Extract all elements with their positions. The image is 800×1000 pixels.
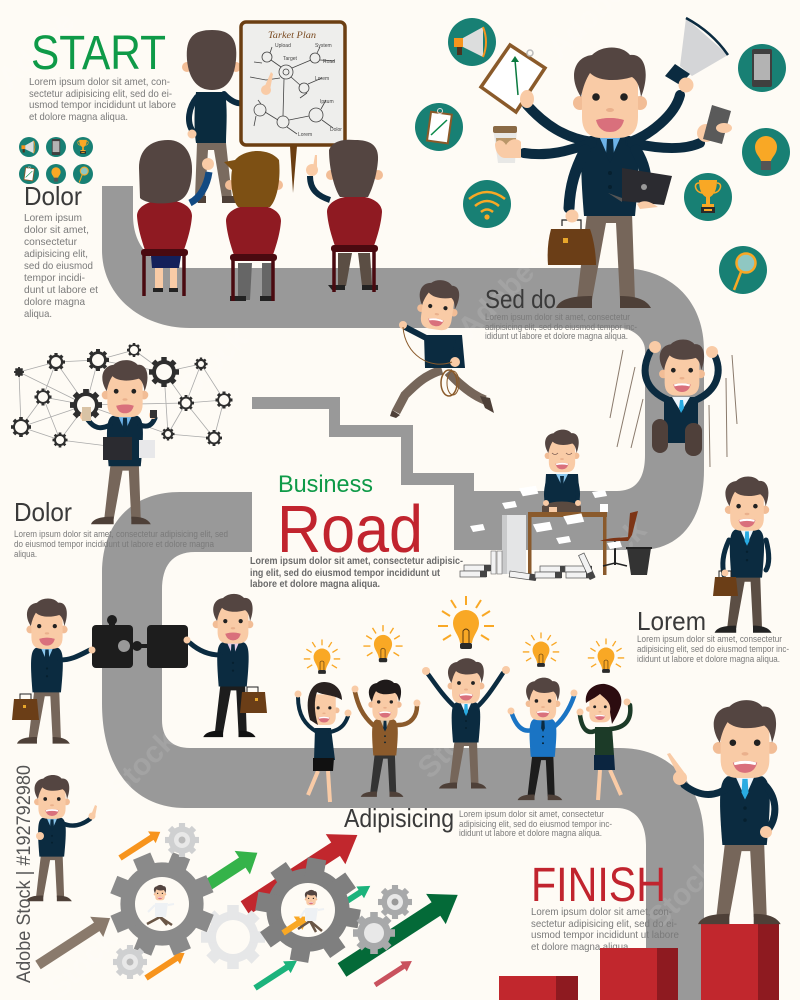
text block: Dolor narrow column: dunt ut labore et — [24, 284, 98, 296]
gear: small right upper — [378, 885, 412, 919]
text block: Lorem: Lorem ipsum dolor sit amet, consectetur — [637, 634, 782, 644]
arrow: dark green large — [332, 880, 468, 985]
audience: blond man on chair — [224, 151, 283, 301]
whiteboard: target plan: Target — [283, 56, 298, 62]
gear: large right with runner — [248, 850, 368, 970]
speed lines — [610, 350, 737, 467]
text block: Dolor middle: Lorem ipsum dolor sit amet, consectetur adipisicing elit, sed — [14, 529, 228, 539]
title: START: START — [31, 27, 166, 80]
text block: Dolor narrow column: sed do eiusmod — [24, 260, 93, 272]
gear: large left with runner — [94, 836, 230, 972]
road: upper winding section — [102, 186, 704, 550]
man in brown jacket, celebrating — [352, 680, 420, 797]
text block: Adipisicing — [459, 809, 612, 838]
text block: start description: sectetur adipisicing elit, sed do ei- — [29, 88, 172, 100]
red bar chart podium — [499, 924, 779, 1000]
arrow: taupe — [31, 908, 117, 975]
watermark: Stock — [642, 854, 723, 935]
text block: Dolor narrow column: aliqua. — [24, 308, 52, 320]
text block: Sed do: Lorem ipsum dolor sit amet, consectetur — [485, 312, 630, 322]
text block: Dolor narrow column: dolor sit amet, — [24, 224, 89, 236]
businessman pointing, bottom left — [26, 775, 97, 901]
stock credit vertical text: Adobe Stock | #192792980 — [14, 765, 35, 983]
whiteboard: target plan: Upload — [275, 43, 291, 49]
man in navy suit, celebrating — [422, 658, 510, 788]
gear: small bottom — [113, 945, 147, 979]
arrow: teal low — [251, 955, 301, 994]
icon: magnifier circle — [719, 246, 767, 294]
title: Road: Road — [277, 492, 423, 567]
text block: Adipisicing: Lorem ipsum dolor sit amet, consectetur — [459, 809, 604, 819]
light bulbs — [304, 596, 624, 674]
text block: Dolor narrow column: Lorem ipsum — [24, 212, 82, 224]
icon: clipboard circle — [415, 103, 463, 151]
man in blue shirt, celebrating — [508, 678, 578, 800]
text block: start description: Lorem ipsum dolor sit amet, con- — [29, 76, 170, 88]
icon: wifi circle — [463, 180, 511, 228]
smartphone in hand — [697, 105, 732, 144]
arrow: teal mid — [326, 880, 374, 918]
whiteboard: target plan: Ipsum — [320, 99, 334, 105]
text block: Lorem — [637, 634, 789, 664]
icon: lightbulb circle — [742, 128, 790, 176]
text block: Road description: labore et dolore magna aliqua. — [250, 578, 380, 590]
text block: finish description — [531, 906, 679, 953]
text block: finish description: Lorem ipsum dolor sit amet, con- — [531, 906, 672, 918]
stair heading: Business: Business — [278, 471, 373, 498]
text block: Road description: ing elit, sed do eiusmod tempor incididunt ut — [250, 567, 440, 579]
whiteboard: target plan — [241, 22, 345, 193]
watermark: Adobe Stock — [102, 322, 255, 475]
text block: Sed do: adipisicing elit, sed do eiusmod tempor inc- — [485, 322, 637, 332]
businessman in gear network — [80, 360, 157, 524]
text block: Dolor middle: aliqua. — [14, 549, 37, 559]
clipboard in hand — [481, 45, 545, 112]
gear: small right lower — [353, 912, 395, 954]
text block: Dolor narrow column: consectetur — [24, 236, 77, 248]
icon grid: six small icons — [19, 137, 93, 184]
audience: man on chair, raised hand — [306, 140, 383, 292]
scattered papers — [470, 486, 622, 549]
presenter seen from behind — [182, 30, 264, 203]
icon: trophy circle — [684, 173, 732, 221]
presenter pointing hand — [261, 72, 273, 95]
whiteboard: target plan: Lorem — [315, 76, 329, 82]
text block: Road description — [250, 555, 463, 590]
watermark: Stock — [572, 514, 653, 595]
tiny runner — [147, 885, 174, 925]
trash can — [626, 547, 652, 575]
briefcase — [548, 210, 596, 265]
whiteboard: target plan: Tarket Plan — [268, 30, 317, 40]
text block: start description: et dolore magna aliqua. — [29, 111, 128, 123]
binders on floor — [460, 551, 595, 581]
arrow: red large — [235, 820, 367, 923]
text block: start description: usmod tempor incididunt ut labore — [29, 99, 176, 111]
coffee cup — [493, 126, 521, 163]
paper stack — [502, 515, 526, 574]
whiteboard: target plan: Road — [323, 59, 335, 65]
text block: finish description: et dolore magna aliqua. — [531, 941, 631, 953]
heading: Adipisicing: Adipisicing — [344, 803, 454, 833]
text block: Adipisicing: ididunt ut labore et dolore magna aliqua. — [459, 828, 602, 838]
businessman holding puzzle, right — [184, 594, 267, 737]
arrow: pink — [372, 956, 415, 990]
text block: Sed do — [485, 312, 637, 341]
whiteboard: target plan: Dolor — [330, 127, 342, 133]
watermark: Stock — [192, 84, 273, 165]
heading: Dolor (middle): Dolor — [14, 497, 72, 527]
text block: finish description: usmod tempor incididunt ut labore — [531, 929, 679, 941]
heading: Dolor (top): Dolor — [24, 181, 82, 211]
meditating businessman at desk — [542, 430, 581, 512]
office chair — [600, 511, 638, 566]
arms — [524, 95, 700, 208]
woman in navy suit, celebrating — [294, 682, 352, 802]
puzzle pieces — [92, 615, 188, 668]
text block: Dolor middle: do eiusmod tempor incididunt ut labore et dolore magna — [14, 539, 214, 549]
road: lower winding section — [102, 492, 704, 1000]
watermark: Stock — [102, 724, 183, 805]
text block: start description — [29, 76, 176, 123]
icon: megaphone circle — [448, 18, 496, 66]
watermark: Adobe Stock — [452, 192, 605, 345]
desk — [528, 512, 607, 575]
whiteboard: target plan: System — [315, 43, 332, 49]
text block: Dolor narrow column: adipisicing elit, — [24, 248, 88, 260]
multitasking businessman — [481, 18, 732, 308]
text block: Road description: Lorem ipsum dolor sit amet, consectetur adipisic- — [250, 555, 463, 567]
title: FINISH: FINISH — [531, 859, 666, 912]
gear network — [11, 343, 232, 450]
coffee mug on desk — [600, 504, 608, 512]
text block: Dolor narrow column — [24, 212, 98, 320]
text block: Lorem: ididunt ut labore et dolore magna aliqua. — [637, 654, 780, 664]
text block: Sed do: ididunt ut labore et dolore magna aliqua. — [485, 331, 628, 341]
tiny runner — [298, 890, 324, 932]
text block: Dolor narrow column: tempor incidi- — [24, 272, 85, 284]
heading: Sed do: Sed do — [485, 284, 556, 314]
woman in green jacket, celebrating — [576, 684, 630, 800]
arrow: green — [189, 841, 265, 904]
laptop — [608, 168, 672, 209]
text block: Dolor narrow column: dolore magna — [24, 296, 85, 308]
whiteboard: target plan: Lorem — [298, 132, 312, 138]
text block: finish description: sectetur adipisicing elit, sed do ei- — [531, 918, 677, 930]
gear: small top — [165, 823, 199, 857]
businessman on podium, finish — [667, 700, 781, 924]
text block: Dolor middle — [14, 529, 228, 559]
audience: woman on chair — [137, 140, 214, 296]
heading: Lorem: Lorem — [637, 606, 706, 636]
jumping businessman — [645, 340, 718, 456]
megaphone in hand — [665, 18, 728, 92]
businessman holding puzzle, left — [12, 599, 96, 744]
arrow: small orange bottom — [142, 947, 188, 984]
icon: phone circle — [738, 44, 786, 92]
road: stair section — [252, 397, 474, 491]
arrow: small orange top — [116, 826, 164, 864]
businessman with briefcase: Lorem — [713, 476, 772, 633]
text block: Adipisicing: adipisicing elit, sed do eiusmod tempor inc- — [459, 819, 612, 829]
gear: pale large — [201, 905, 265, 969]
running businessman with rope — [390, 277, 494, 418]
watermark: Stock — [412, 704, 493, 785]
